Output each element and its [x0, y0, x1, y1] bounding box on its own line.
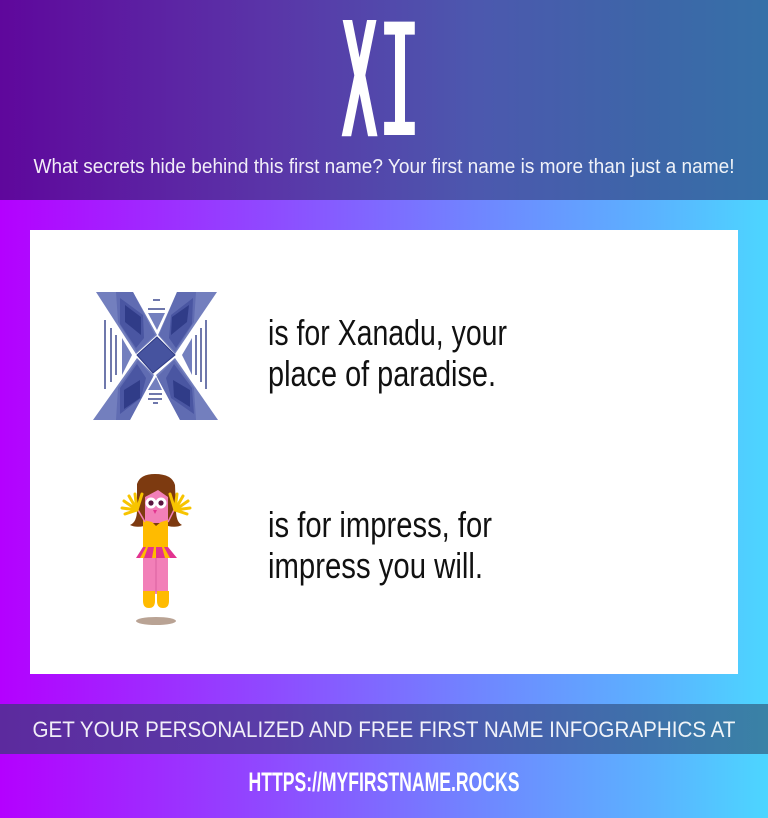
footer call-to-action band: [0, 704, 768, 754]
text: X line: [268, 312, 507, 394]
icon: cheerleader girl: [122, 474, 190, 625]
text: I line: impress you will.: [268, 545, 483, 586]
text: X line: is for Xanadu, your: [268, 312, 507, 353]
icon: geometric letter X: [93, 292, 218, 420]
white content panel: [30, 230, 738, 674]
subtitle: What secrets hide behind this first name? Your first name is more than just a name!: [34, 156, 734, 178]
footer call-to-action band: GET YOUR PERSONALIZED AND FREE FIRST NAME INFOGRAPHICS AT: [32, 717, 736, 742]
text: X line: place of paradise.: [268, 353, 496, 394]
title: XI: [342, 0, 422, 187]
text: I line: [268, 504, 492, 586]
text: I line: is for impress, for: [268, 504, 492, 545]
footer URL: HTTPS://MYFIRSTNAME.ROCKS: [248, 767, 520, 797]
ground shadow: [136, 617, 176, 625]
header band: [0, 0, 768, 200]
